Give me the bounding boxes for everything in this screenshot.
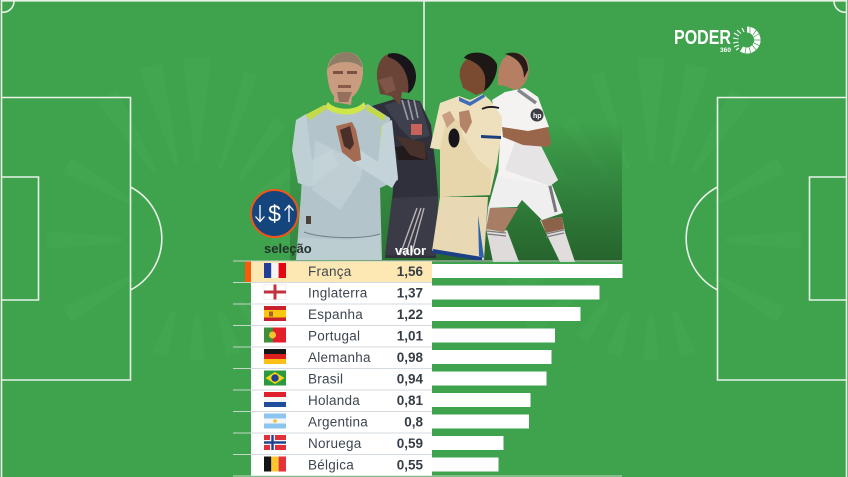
row: Alemanha: Alemanha (308, 350, 371, 365)
logo: Poder360 (674, 26, 761, 54)
row: Portugal: Portugal (308, 328, 360, 344)
row: Holanda: Holanda (308, 393, 360, 408)
row: Holanda (264, 392, 423, 408)
row: Alemanha (264, 349, 423, 365)
player: Mbappé, white kit: hp (533, 113, 542, 120)
row: França: 1,56 (397, 264, 423, 279)
row: Argentina: Argentina (308, 414, 368, 430)
player: Haaland, grey kit (292, 52, 398, 260)
row: Espanha: 1,22 (397, 307, 423, 322)
column heading: selecao: seleção (264, 241, 312, 256)
row: Argentina: 0,8 (404, 414, 423, 430)
row: França: França (308, 264, 352, 279)
row: Noruega (264, 435, 423, 451)
table background (245, 261, 432, 476)
logo: Poder360: 360 (720, 47, 731, 54)
row: Espanha: Espanha (308, 307, 363, 322)
row: Holanda: 0,81 (397, 393, 423, 408)
player: Vinicius, dark kit (372, 53, 438, 258)
row: Bélgica: 0,55 (397, 458, 423, 472)
row: Brasil: Brasil (308, 372, 343, 386)
player: Yamal, cream kit (430, 53, 502, 261)
icon: money value arrows: $ (268, 200, 281, 226)
row: Inglaterra: Inglaterra (308, 286, 368, 300)
dark gradient behind players (290, 120, 622, 262)
player: Mbappé, white kit (486, 53, 575, 262)
row: Bélgica: Bélgica (308, 458, 354, 472)
logo: Poder360: PODER (674, 27, 731, 49)
row: Portugal: 1,01 (397, 328, 423, 344)
row separators (233, 261, 622, 476)
icon: money value arrows (251, 190, 298, 237)
row: Brasil: 0,94 (397, 372, 423, 386)
row: Brasil (264, 370, 423, 386)
row: Noruega: Noruega (308, 436, 362, 451)
white bars (432, 264, 622, 472)
row: França (264, 263, 423, 279)
row: Alemanha: 0,98 (397, 350, 423, 365)
row: Bélgica (264, 456, 423, 472)
row: Espanha (264, 306, 423, 322)
column heading: valor: valor (395, 243, 426, 258)
row: Portugal (264, 328, 423, 344)
row: Inglaterra: 1,37 (397, 286, 423, 300)
row: Inglaterra (264, 284, 423, 300)
row: Noruega: 0,59 (397, 436, 423, 451)
row: Argentina (264, 414, 423, 430)
